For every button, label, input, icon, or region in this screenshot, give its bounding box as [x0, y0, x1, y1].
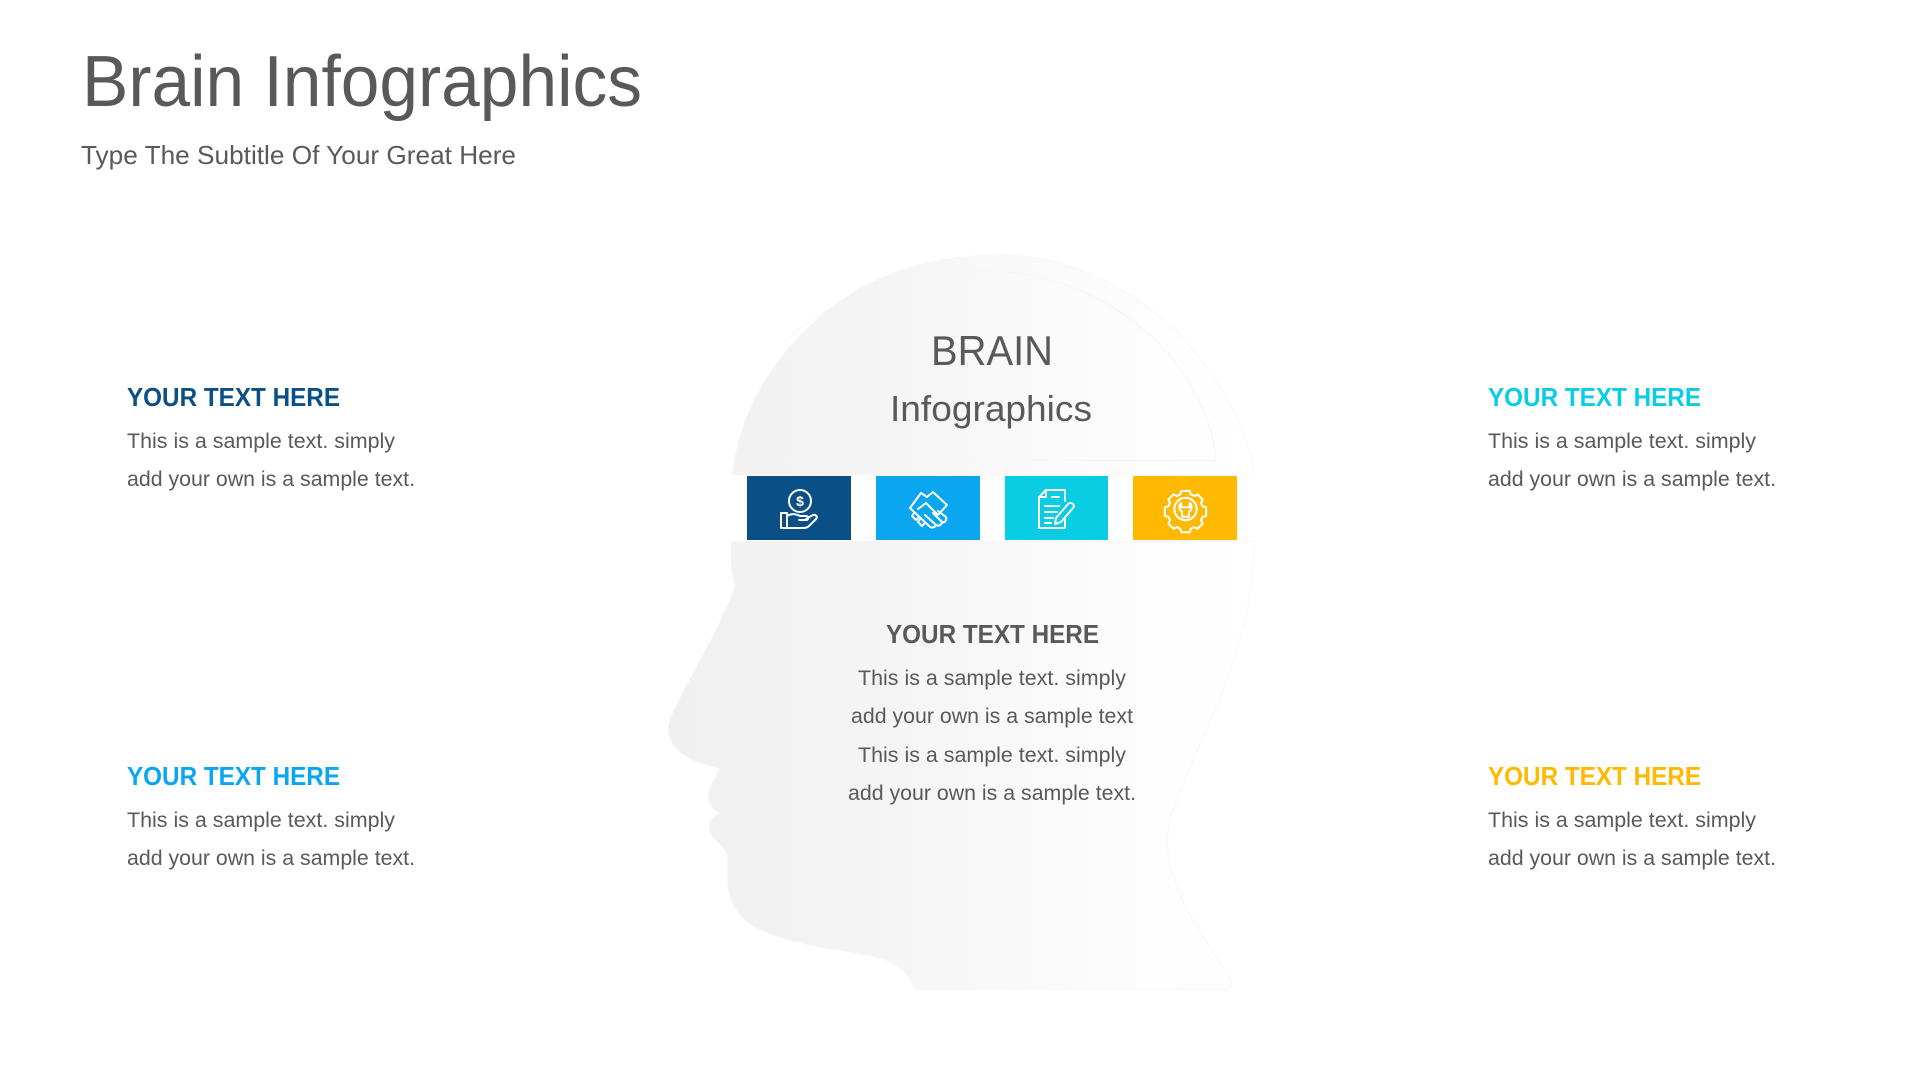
- left text block 2: [127, 761, 415, 870]
- body: This is a sample text. simply: [858, 667, 1127, 690]
- body: add your own is a sample text.: [1488, 847, 1776, 870]
- right text block 1: [1488, 382, 1776, 491]
- body: This is a sample text. simply: [1488, 809, 1757, 832]
- icon tile: gear with wrench: [1133, 476, 1237, 540]
- icon tile: handshake: [876, 476, 980, 540]
- body: This is a sample text. simply: [127, 430, 396, 453]
- body: This is a sample text. simply: [1488, 430, 1757, 453]
- center heading: BRAIN: BRAIN: [931, 327, 1053, 374]
- body: add your own is a sample text.: [1488, 468, 1776, 491]
- body: This is a sample text. simply: [858, 744, 1127, 767]
- title: Brain Infographics: [82, 42, 642, 122]
- body: This is a sample text. simply: [127, 809, 396, 832]
- head: skull dome: [732, 255, 1254, 475]
- body: add your own is a sample text.: [127, 468, 415, 491]
- body: [127, 430, 415, 491]
- subtitle: Type The Subtitle Of Your Great Here: [81, 140, 516, 170]
- heading: YOUR TEXT HERE: [1488, 761, 1701, 791]
- heading: YOUR TEXT HERE: [1488, 382, 1701, 412]
- left text block 1: [127, 382, 415, 491]
- head silhouette: [668, 255, 1254, 989]
- icon tile: money in hand: [747, 476, 851, 540]
- body: [1488, 430, 1776, 491]
- heading: YOUR TEXT HERE: [127, 761, 340, 791]
- body: add your own is a sample text.: [848, 782, 1136, 805]
- center subheading: Infographics: Infographics: [890, 388, 1092, 429]
- icon tile: document and pen: [1005, 476, 1108, 540]
- heading: YOUR TEXT HERE: [886, 619, 1099, 649]
- body: [127, 809, 415, 870]
- icon tile: money in hand: $: [796, 493, 804, 509]
- right text block 2: [1488, 761, 1776, 870]
- heading: YOUR TEXT HERE: [127, 382, 340, 412]
- center text block: [848, 619, 1136, 805]
- body: add your own is a sample text: [851, 705, 1133, 728]
- body: [848, 667, 1136, 805]
- body: [1488, 809, 1776, 870]
- head: face and neck: [668, 541, 1254, 989]
- body: add your own is a sample text.: [127, 847, 415, 870]
- head: dome inner outline: [784, 272, 1216, 460]
